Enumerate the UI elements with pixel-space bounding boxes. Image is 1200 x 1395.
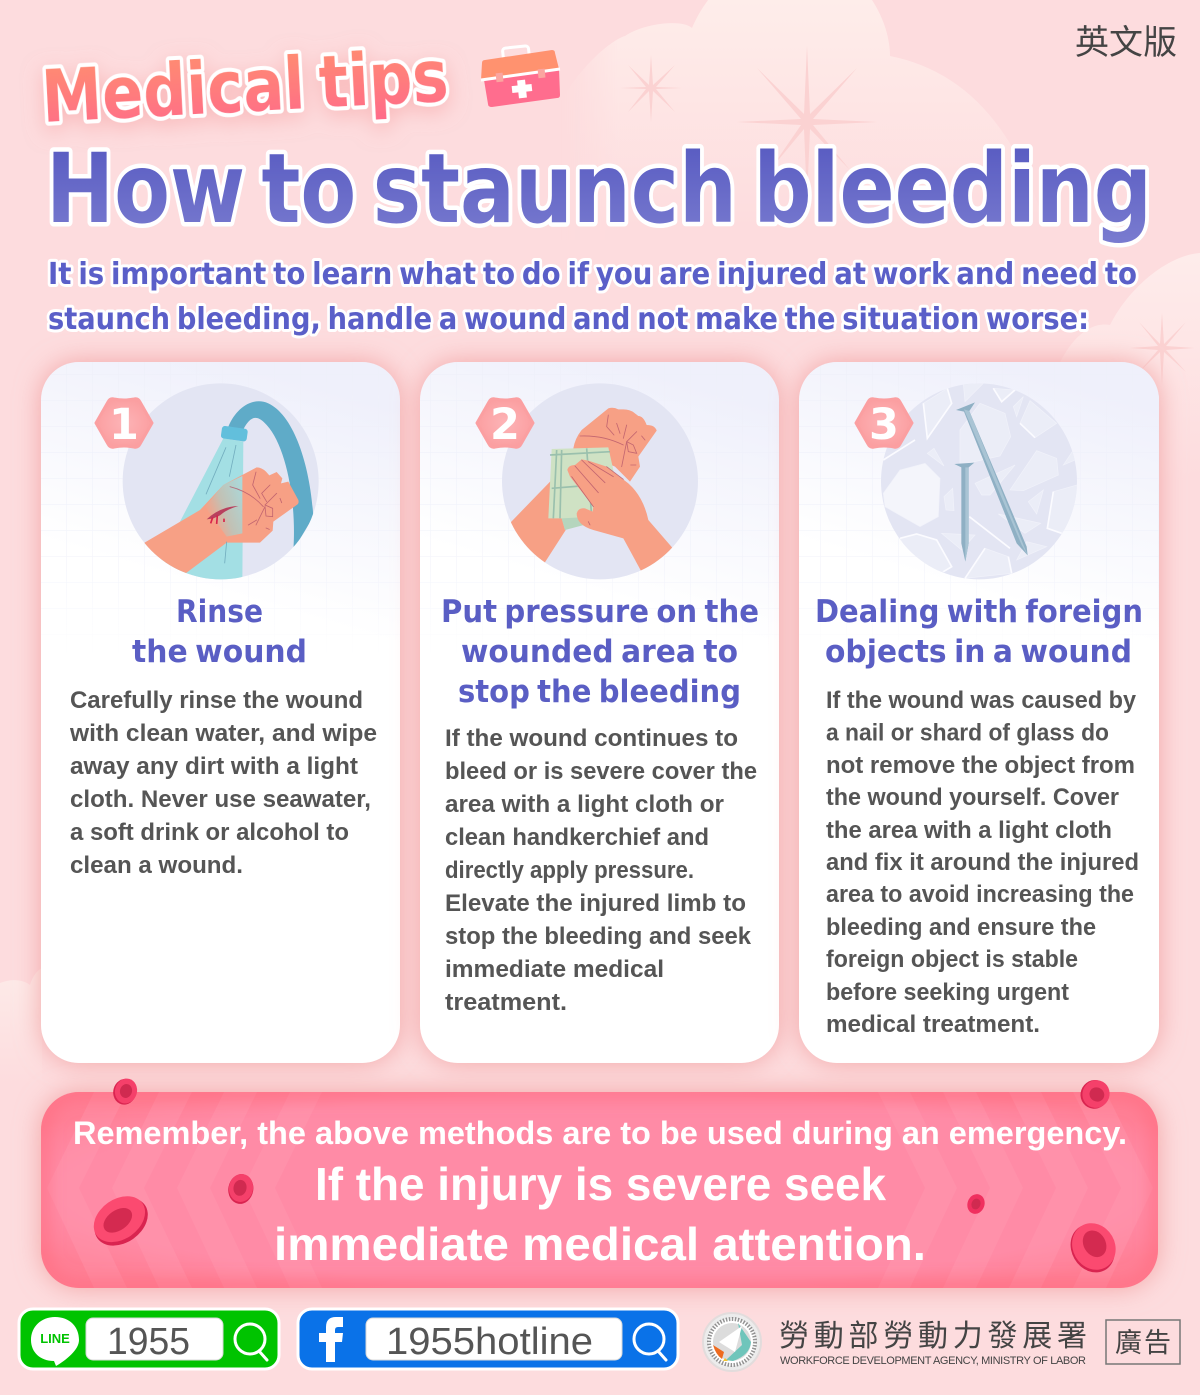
- text: pressure instructions: immediate medical: [445, 956, 664, 983]
- text: rinse instructions: [69, 687, 377, 879]
- text: pressure instructions: clean handkerchief and: [445, 824, 709, 851]
- heading: put pressure: [441, 594, 759, 710]
- panel: step 2 apply pressure: [420, 362, 779, 1063]
- text: foreign object instructions: medical treatment.: [826, 1011, 1040, 1038]
- text: pressure instructions: directly apply pressure.: [445, 857, 694, 884]
- icon: red blood cells: [84, 1074, 1125, 1281]
- heading: rinse the wound: Rinse: [176, 594, 263, 630]
- text: rinse instructions: Carefully rinse the wound: [70, 687, 363, 714]
- intro text: It is important to learn what to do if you are injured at work and need to: [48, 257, 1137, 292]
- text: foreign object instructions: foreign object is stable: [826, 946, 1078, 973]
- icon: nails and broken glass: [881, 383, 1080, 579]
- panel: emergency banner: [41, 1074, 1158, 1290]
- text: foreign object instructions: before seeking urgent: [826, 979, 1069, 1006]
- text: foreign object instructions: area to avoid increasing the: [826, 881, 1134, 908]
- language tag: 英文版: [1075, 15, 1177, 64]
- background clouds: [0, 0, 1200, 1090]
- logo: Workforce Development Agency: [703, 1313, 761, 1371]
- badge: number 3: 3: [869, 400, 899, 450]
- heading: put pressure: stop the bleeding: [458, 674, 741, 710]
- text: rinse instructions: clean a wound.: [70, 852, 243, 879]
- text: foreign object instructions: not remove the object from: [826, 752, 1135, 779]
- text: pressure instructions: stop the bleeding and seek: [445, 923, 752, 950]
- agency name: 勞動部勞動力發展署: [779, 1311, 1087, 1355]
- search box: LINE: 1955: [107, 1321, 190, 1363]
- banner text: If the injury is severe seek: [315, 1158, 886, 1210]
- icon: hands pressing cloth: [500, 383, 698, 579]
- icon: LINE bubble: [31, 1317, 79, 1366]
- text: pressure instructions: Elevate the injured limb to: [445, 890, 746, 917]
- title: Medical tips: Medical tips: [39, 34, 450, 139]
- badge: number 2: 2: [490, 400, 520, 450]
- text: foreign object instructions: the wound yourself. Cover: [826, 784, 1119, 811]
- text: foreign object instructions: [826, 687, 1139, 1038]
- agency name: WORKFORCE DEVELOPMENT AGENCY, MINISTRY OF LABOR: [780, 1355, 1086, 1367]
- intro text: [48, 257, 1137, 337]
- banner text: Remember, the above methods are to be used during an emergency.: [73, 1115, 1127, 1151]
- text: rinse instructions: away any dirt with a light: [70, 753, 358, 780]
- text: pressure instructions: If the wound continues to: [445, 725, 738, 752]
- heading: dealing with foreign objects: [815, 594, 1143, 670]
- text: rinse instructions: with clean water, and wipe: [69, 720, 377, 747]
- advertisement tag: 廣告: [1115, 1321, 1171, 1360]
- icon: search: [634, 1324, 666, 1360]
- text: pressure instructions: treatment.: [445, 989, 567, 1016]
- text: pressure instructions: area with a light cloth or: [445, 791, 724, 818]
- text: foreign object instructions: If the wound was caused by: [826, 687, 1137, 714]
- banner text: [73, 1115, 1127, 1270]
- text: foreign object instructions: bleeding and ensure the: [826, 914, 1096, 941]
- search box: LINE: [19, 1309, 279, 1369]
- text: foreign object instructions: the area with a light cloth: [826, 817, 1112, 844]
- sparkle decorations: [620, 46, 1194, 385]
- badge: number 1: 1: [109, 400, 139, 450]
- badge: number 2: [477, 399, 533, 450]
- badge: number 3: [856, 399, 912, 450]
- icon: search: [235, 1324, 267, 1360]
- text: foreign object instructions: and fix it around the injured: [826, 849, 1139, 876]
- heading: dealing with foreign objects: Dealing with foreign: [815, 594, 1143, 630]
- search box: Facebook: 1955hotline: [386, 1321, 593, 1363]
- badge: number 1: [96, 399, 152, 450]
- icon: LINE bubble: LINE: [40, 1331, 70, 1346]
- text: rinse instructions: a soft drink or alcohol to: [70, 819, 349, 846]
- heading: dealing with foreign objects: objects in a wound: [825, 634, 1132, 670]
- heading: put pressure: wounded area to: [461, 634, 738, 670]
- text: pressure instructions: bleed or is severe cover the: [445, 758, 757, 785]
- intro text: staunch bleeding, handle a wound and not make the situation worse:: [48, 302, 1089, 337]
- icon: first aid kit: [481, 46, 560, 107]
- heading: put pressure: Put pressure on the: [441, 594, 759, 630]
- icon: Facebook f: [319, 1317, 343, 1362]
- icon: hand under running water: [123, 383, 319, 583]
- text: pressure instructions: [445, 725, 757, 1016]
- text: foreign object instructions: a nail or shard of glass do: [826, 720, 1109, 746]
- text: rinse instructions: cloth. Never use seawater,: [70, 786, 371, 813]
- heading: rinse the wound: the wound: [132, 634, 307, 670]
- panel: step 3 foreign objects: [799, 362, 1159, 1063]
- heading: rinse the wound: [132, 594, 307, 670]
- panel: step 1 rinse the wound: [41, 362, 400, 1063]
- advertisement tag: [1106, 1320, 1180, 1364]
- search box: Facebook: [298, 1309, 678, 1369]
- banner text: immediate medical attention.: [274, 1218, 926, 1270]
